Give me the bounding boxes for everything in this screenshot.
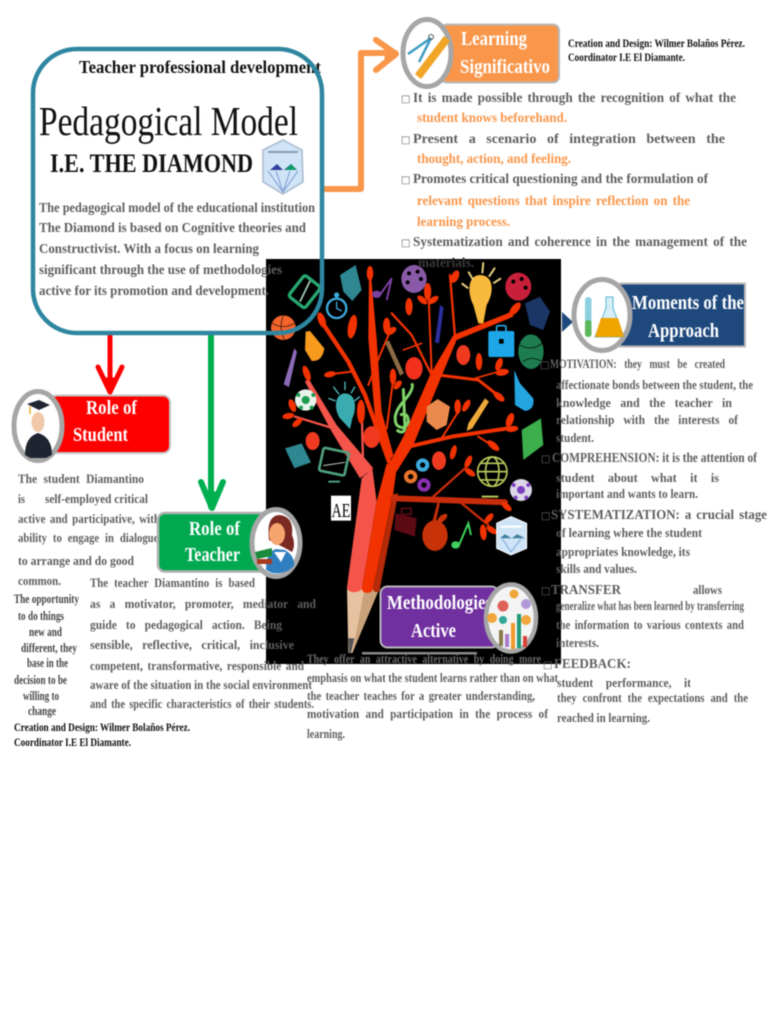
text: intro paragraph: The Diamond is based on Cognitive theories and — [39, 221, 306, 236]
icon: AB card — [331, 496, 351, 522]
text: student description — [18, 471, 161, 588]
icon: green soccer ball — [295, 389, 316, 411]
panel: methodologies active — [307, 584, 559, 741]
icon: globe — [478, 457, 507, 497]
text: learning bullet list: □ — [401, 135, 410, 146]
text: teacher description — [90, 575, 317, 711]
text: student description: self-employed critical — [45, 491, 148, 506]
header: methodologies active — [380, 584, 536, 652]
text: methodologies paragraph — [307, 651, 559, 741]
icon: school shield logo — [263, 140, 303, 194]
text: opportunity note — [14, 592, 80, 718]
icon: teal book — [340, 265, 362, 301]
text: moments list: □ — [540, 360, 549, 371]
text: learning bullet list: It is made possible through the recognition of what the — [413, 91, 736, 106]
credit — [568, 36, 745, 64]
icon: blue flask — [514, 370, 534, 411]
icon: green ball — [518, 334, 544, 369]
text: moments list: student performance, it — [557, 675, 692, 690]
text: teacher description: competent, transformative, responsible and — [90, 658, 305, 673]
panel: learning significativo — [401, 20, 747, 271]
icon: purple music note — [372, 278, 392, 300]
text: student description: ability to engage in dialogue, — [18, 530, 161, 545]
text: learning bullet list — [401, 91, 747, 271]
header: role of student — [14, 392, 170, 460]
text: opportunity note: different, they — [21, 641, 78, 655]
icon: teal light bulb — [328, 382, 360, 429]
header: learning significativo: Significativo — [460, 56, 550, 78]
icon: monitor — [319, 448, 349, 482]
icon: orange die — [427, 399, 450, 430]
text: learning bullet list: □ — [401, 175, 410, 186]
header: learning significativo: Learning — [461, 28, 527, 50]
header: role of teacher: Teacher — [185, 544, 240, 566]
text: moments list: student. — [556, 430, 594, 445]
icon: blue bag — [488, 326, 514, 357]
icon: purple palette — [401, 265, 427, 293]
icon: green book — [522, 418, 543, 460]
credit: Coordinator I.E El Diamante. — [568, 50, 685, 64]
tree branches — [295, 275, 513, 525]
text: opportunity note: to do things — [18, 609, 64, 623]
credit lower: Coordinator I.E El Diamante. — [14, 735, 131, 749]
header: moments of the approach — [574, 280, 745, 350]
text: moments list: of learning where the student — [556, 525, 703, 540]
text: intro paragraph: Constructivist. With a focus on learning — [39, 242, 259, 257]
icon: school shield small — [497, 517, 527, 555]
text: moments list: □ — [541, 586, 550, 597]
text: moments list: allows — [693, 582, 722, 597]
text: teacher description: as a motivator, promoter, mediator and — [90, 596, 317, 611]
text: methodologies paragraph: the teacher teaches for a greater understanding, — [307, 688, 535, 703]
connector: orange arrow to Learning Significativo — [323, 40, 398, 189]
text: intro paragraph: active for its promotion and development. — [39, 284, 269, 299]
text: teacher description: and the specific characteristics of their students. — [90, 696, 314, 711]
icon: gears — [406, 460, 429, 490]
text: intro paragraph — [39, 201, 315, 299]
icon: purple crayon — [284, 348, 297, 387]
text: learning bullet list: □ — [401, 94, 410, 105]
text: moments list: student about what it is — [556, 470, 719, 485]
panel outline — [33, 49, 322, 333]
text: student description: to arrange and do good — [18, 553, 135, 568]
text: learning bullet list: student knows beforehand. — [417, 111, 567, 126]
text: methodologies paragraph: learning. — [307, 726, 345, 741]
text: student description: The student Diamantino — [18, 471, 144, 486]
text: learning bullet list: □ — [401, 238, 410, 249]
text: opportunity note: willing to — [23, 689, 59, 703]
text: learning bullet list: learning process. — [417, 215, 510, 230]
icon: compass and ruler — [403, 20, 451, 86]
icon: coloured pencils and speech bubbles — [486, 584, 536, 652]
text: learning bullet list: materials. — [418, 256, 474, 271]
text: learning bullet list: Systematization and coherence in the management of the — [413, 235, 747, 250]
subtitle: I.E. the diamond: I.E. THE DIAMOND — [50, 149, 253, 178]
credit lower: Creation and Design: Wilmer Bolaños Pérez. — [14, 720, 190, 734]
header: role of teacher — [158, 510, 300, 576]
text: learning bullet list: Promotes critical questioning and the formulation of — [413, 172, 708, 187]
icon: yellow pencil — [467, 398, 489, 431]
text: student description: is — [18, 491, 25, 506]
icon: teal book lower — [285, 443, 311, 468]
text: methodologies paragraph: They offer an attractive alternative by doing more — [307, 651, 541, 666]
panel: pedagogical model intro — [33, 49, 322, 333]
icon: ABC block — [525, 297, 550, 330]
header: role of student: Student — [73, 424, 128, 446]
icon: orange flask — [305, 331, 324, 361]
text: moments list: knowledge and the teacher in — [556, 395, 733, 410]
text: moments list: skills and values. — [556, 561, 637, 576]
text: moments list: □ — [541, 511, 550, 522]
tree leaves — [282, 266, 523, 541]
icon: green tablet — [288, 275, 321, 309]
text: learning bullet list: relevant questions that inspire reflection on the — [417, 194, 690, 209]
icon: red palette — [505, 273, 531, 301]
panel: role of student — [14, 392, 190, 749]
text: moments list: □ — [541, 454, 550, 465]
text: opportunity note: new and — [29, 625, 62, 639]
header: role of student: Role of — [86, 397, 137, 419]
icon: light bulb — [462, 262, 501, 323]
header: moments of the approach: Approach — [648, 320, 719, 342]
text: methodologies paragraph: motivation and participation in the process of — [307, 706, 549, 721]
icon: graduate avatar — [14, 392, 62, 460]
picture: pencil tree on black background — [266, 259, 561, 664]
text: moments list: reached in learning. — [557, 710, 650, 725]
text: intro paragraph: significant through the use of methodologies — [39, 263, 282, 278]
icon: basketball — [271, 315, 296, 340]
text: teacher description: sensible, reflective, critical, inclusive — [90, 637, 294, 652]
text: opportunity note: base in the — [27, 656, 68, 670]
text: moments list: TRANSFER — [551, 583, 622, 598]
text: moments list — [540, 356, 767, 725]
icon: blue pen — [435, 305, 444, 343]
text: student description: active and participative, with — [18, 511, 161, 526]
text: moments list: appropriates knowledge, its — [556, 544, 690, 559]
icon: alarm clock — [327, 292, 346, 318]
text: moments list: □ — [543, 660, 552, 671]
header: methodologies active: Methodologies — [387, 592, 492, 614]
text: teacher description: aware of the situation in the social environment — [90, 677, 313, 692]
text: intro paragraph: The pedagogical model of the educational institution — [39, 201, 315, 216]
text: opportunity note: The opportunity — [14, 592, 80, 606]
header: methodologies active: Active — [411, 620, 456, 642]
header: learning significativo — [403, 20, 559, 86]
text: opportunity note: decision to be — [14, 673, 67, 687]
text: moments list: interests. — [556, 635, 599, 650]
text: teacher description: The teacher Diamantino is based — [90, 575, 256, 590]
text: learning bullet list: thought, action, and feeling. — [417, 152, 571, 167]
icon: AB card: AE — [332, 500, 350, 522]
text: moments list: important and wants to learn. — [556, 486, 698, 501]
connector: green arrow to Role of Teacher — [201, 335, 223, 508]
header: moments of the approach: Moments of the — [632, 292, 744, 314]
text: student description: common. — [18, 573, 61, 588]
header: role of teacher: Role of — [189, 518, 240, 540]
panel: role of teacher — [90, 510, 317, 711]
text: moments list: relationship with the interests of — [556, 412, 739, 427]
icon: large apple — [422, 503, 449, 551]
text: teacher description: guide to pedagogical action. Being — [90, 617, 282, 632]
heading: teacher professional development: Teacher professional development — [79, 57, 321, 77]
icon: brush — [385, 340, 404, 376]
text: learning bullet list: Present a scenario of integration between the — [413, 132, 725, 147]
shadow under header — [362, 652, 477, 654]
icon: green music note — [451, 523, 471, 549]
panel: moments of the approach — [540, 280, 767, 725]
pencil trunk — [347, 463, 398, 653]
text: moments list: FEEDBACK: — [554, 657, 631, 672]
icon: treble clef — [395, 383, 412, 432]
connector: blue triangle to Moments of the Approach — [562, 312, 573, 332]
icon: flask and test tube — [574, 280, 630, 350]
icon: apples — [306, 345, 470, 470]
icon: purple soccer ball — [510, 479, 532, 501]
connector: red arrow to Role of Student — [98, 335, 122, 392]
icon: teacher avatar — [252, 510, 300, 576]
text: opportunity note: change — [28, 704, 56, 718]
text: methodologies paragraph: emphasis on what the student learns rather than on what — [307, 670, 559, 685]
credit lower — [14, 720, 190, 749]
icon: dark red bag — [394, 508, 417, 537]
title: pedagogical model: Pedagogical Model — [39, 98, 298, 144]
